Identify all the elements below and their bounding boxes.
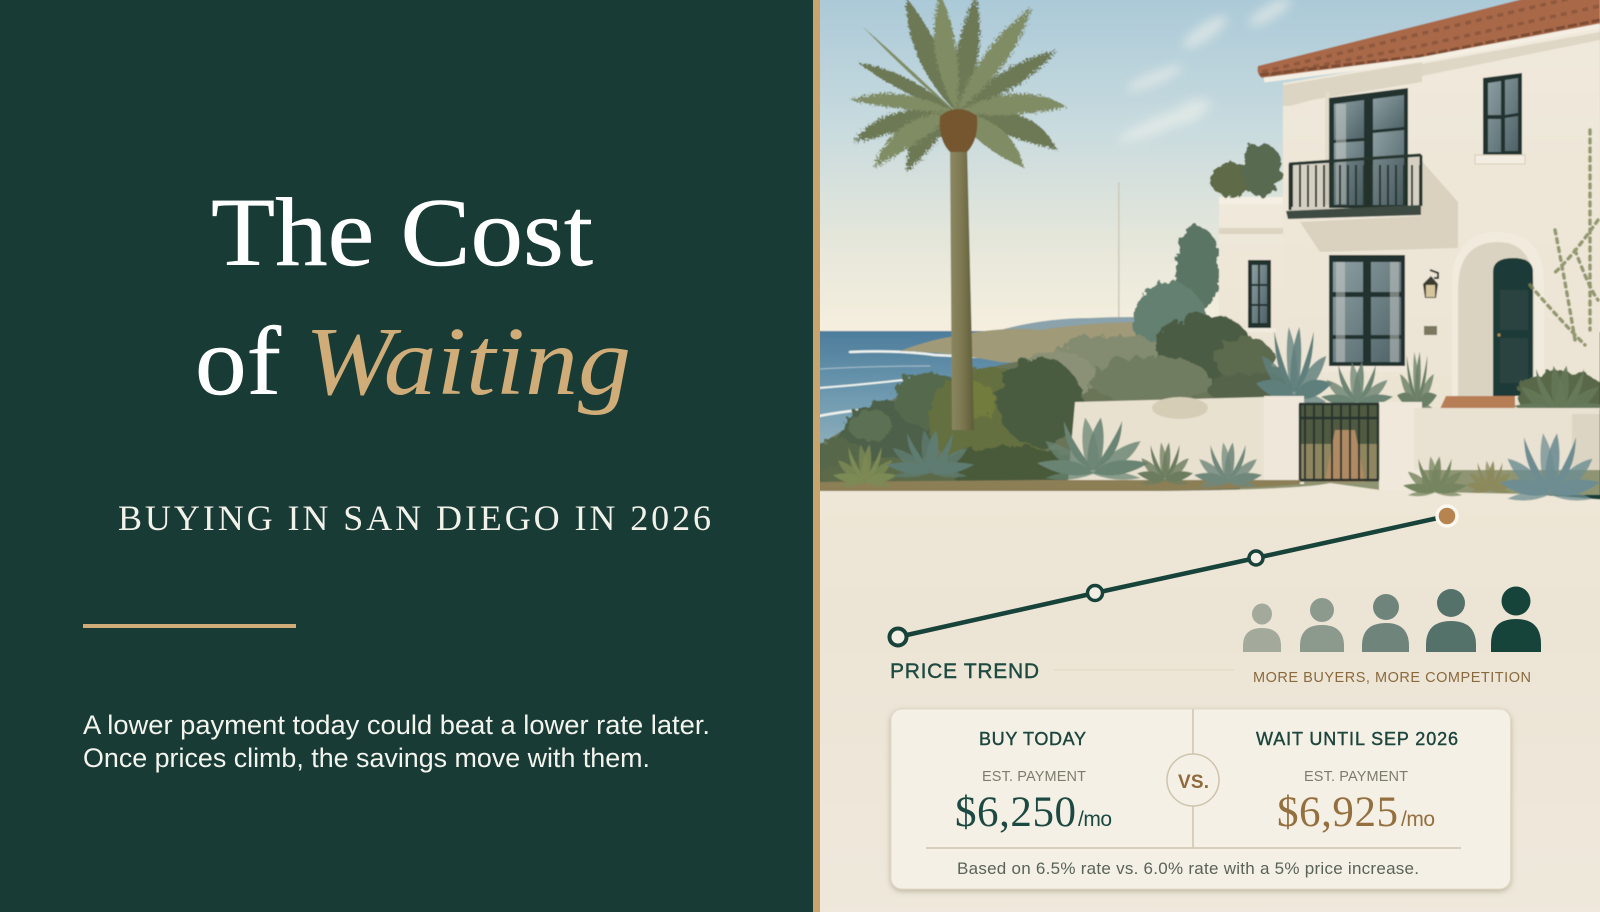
arched door	[1452, 232, 1544, 398]
body text: A lower payment today could beat a lower rate later.	[83, 710, 710, 740]
gold divider band	[813, 0, 820, 912]
palm fronds	[850, 0, 1067, 173]
column: wait until sep 2026: $6,925	[1277, 789, 1398, 836]
lower left window	[1244, 260, 1276, 332]
vs badge	[1167, 754, 1219, 806]
column: wait until sep 2026	[1256, 729, 1458, 836]
column: buy today	[955, 729, 1112, 836]
palm trunk	[950, 145, 974, 430]
left foliage	[808, 358, 1082, 491]
background shrub base	[819, 300, 1300, 500]
house agaves	[1256, 327, 1600, 421]
lower main window	[1323, 255, 1413, 372]
right wall plant	[1530, 130, 1598, 345]
front garden wall	[1068, 396, 1600, 492]
entry steps	[1440, 396, 1515, 409]
column: wait until sep 2026: WAIT UNTIL SEP 2026	[1256, 729, 1458, 749]
body text	[83, 710, 710, 773]
headland	[1000, 317, 1170, 360]
panel: coastal house illustration	[808, 0, 1600, 912]
panel: payment comparison card	[891, 709, 1510, 889]
waves	[819, 351, 1010, 416]
balcony bush	[1210, 143, 1282, 198]
title: The Cost	[211, 179, 593, 287]
body text: Once prices climb, the savings move with them.	[83, 743, 650, 773]
balcony shadow	[1300, 160, 1458, 252]
palm crown	[940, 109, 977, 152]
label: price trend: PRICE TREND	[890, 660, 1039, 683]
balcony railing	[1286, 155, 1421, 219]
house shrubs	[1090, 314, 1600, 419]
column: wait until sep 2026: /mo	[1401, 808, 1435, 831]
title: of	[195, 308, 281, 416]
column: buy today: EST. PAYMENT	[982, 769, 1086, 785]
title	[195, 179, 631, 416]
tree behind house	[1015, 226, 1220, 399]
house walls	[1219, 26, 1600, 430]
panel: dark green text panel	[0, 0, 813, 912]
label: more buyers: MORE BUYERS, MORE COMPETITION	[1253, 670, 1531, 686]
icon: rising buyers	[1243, 586, 1541, 652]
line chart: price trend	[890, 506, 1457, 646]
house number	[1424, 326, 1437, 335]
column: buy today: /mo	[1078, 808, 1112, 831]
column: wait until sep 2026: EST. PAYMENT	[1304, 769, 1408, 785]
clouds	[1116, 0, 1294, 148]
terracotta roof	[1258, 0, 1600, 80]
wall lantern	[1423, 270, 1438, 298]
upper right window	[1475, 73, 1525, 164]
title: Waiting	[305, 308, 631, 416]
upper balcony window	[1325, 88, 1408, 208]
ground	[810, 483, 1600, 912]
ground soil line	[819, 480, 1300, 491]
front agaves	[833, 418, 1600, 501]
vs badge: VS.	[1178, 772, 1209, 793]
column: buy today: BUY TODAY	[979, 729, 1086, 749]
column: buy today: $6,250	[955, 789, 1076, 836]
iron gate	[1299, 404, 1379, 482]
accent rule	[83, 624, 296, 628]
footnote: Based on 6.5% rate vs. 6.0% rate with a 5% price increase.	[957, 859, 1419, 878]
subtitle: BUYING IN SAN DIEGO IN 2026	[118, 498, 711, 538]
sky	[810, 0, 1600, 332]
antenna	[1118, 182, 1120, 318]
ocean	[810, 331, 1020, 451]
